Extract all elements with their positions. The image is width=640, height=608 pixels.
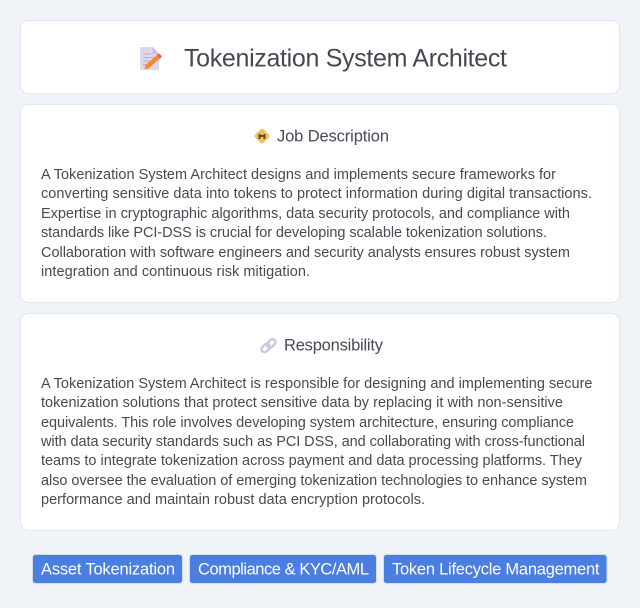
tag: asset tokenization	[32, 554, 182, 584]
tag: compliance	[190, 554, 376, 584]
title: Tokenization System Architect	[184, 44, 507, 72]
panel: job description	[20, 104, 620, 302]
text block: responsibility: performance and maintain robust data encryption protocols.	[41, 492, 425, 508]
text block: responsibility: A Tokenization System Architect is responsible for designing and implementing secure	[41, 376, 592, 392]
text block: job description	[41, 167, 592, 280]
text block: job description: A Tokenization System Architect designs and implements secure frameworks for	[41, 167, 556, 183]
text block: job description: standards like PCI-DSS is crucial for developing scalable tokenization solutions.	[41, 225, 547, 241]
text block: responsibility: with data security standards such as PCI DSS, and collaborating with cross-functional	[40, 434, 585, 450]
tag: asset tokenization: Asset Tokenization	[41, 560, 175, 578]
tag: token lifecycle management	[384, 554, 607, 584]
text block: responsibility: teams to integrate tokenization across payment and data processing platforms. They	[41, 453, 583, 469]
text block: responsibility: tokenization solutions that protect sensitive data by replacing it with non-sensitive	[41, 395, 563, 411]
heading: job description: Job Description	[277, 128, 389, 146]
icon: link	[260, 338, 277, 353]
tag: token lifecycle management: Token Lifecycle Management	[392, 560, 600, 578]
tag: compliance: Compliance & KYC/AML	[198, 560, 369, 578]
text block: job description: converting sensitive data into tokens to protect information during digital transactions.	[41, 186, 592, 202]
text block: job description: Collaboration with software engineers and security analysts ensures robust system	[41, 245, 570, 261]
heading: responsibility: Responsibility	[284, 336, 384, 354]
text block: responsibility: also oversee the evaluation of emerging tokenization technologies to enhance system	[41, 473, 587, 489]
text block: responsibility: equivalents. This role involves developing system architecture, ensuring compliance	[41, 415, 574, 431]
panel: responsibility	[20, 314, 620, 530]
text block: job description: integration and continuous risk mitigation.	[41, 264, 310, 280]
text block: responsibility	[40, 376, 592, 508]
icon: document with pencil	[140, 47, 162, 70]
icon: orange diamond	[254, 128, 270, 144]
panel: title header	[20, 20, 620, 94]
text block: job description: Expertise in cryptographic algorithms, data security protocols, and compliance with	[41, 206, 570, 222]
